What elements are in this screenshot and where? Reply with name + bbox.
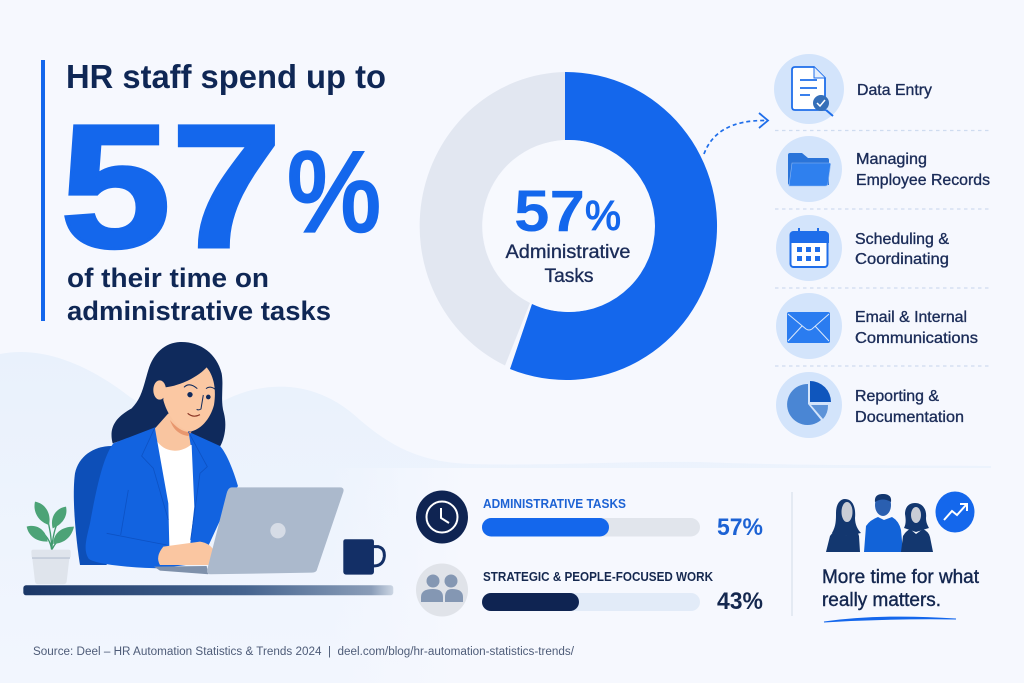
ear: [153, 380, 166, 400]
title block: [41, 58, 386, 326]
item: reporting and documentation: [776, 372, 964, 438]
donut label: 57: [514, 179, 585, 244]
icon: team: [826, 494, 933, 552]
callout: more time: [822, 492, 980, 622]
accent bar: [41, 60, 45, 321]
arrow: donut to task list: [704, 113, 768, 154]
chin shadow: [170, 420, 192, 436]
icon: clock: [416, 490, 468, 544]
item: managing employee records: Employee Records: [856, 172, 990, 189]
facial features: [184, 385, 215, 416]
item: reporting and documentation: Documentation: [855, 409, 964, 426]
donut chart: Tasks: [544, 266, 594, 287]
donut hole: [483, 140, 655, 312]
donut chart: %: [585, 192, 621, 239]
donut chart: Administrative: [506, 242, 630, 263]
item: managing employee records: [776, 136, 990, 202]
value: 57%: 57%: [717, 514, 763, 541]
title block: administrative tasks: [67, 296, 331, 326]
callout text: More time for what: [822, 567, 980, 588]
item: managing employee records: Managing: [856, 151, 927, 168]
bar: strategic work: [482, 593, 700, 611]
callout: more time: really matters.: [822, 590, 941, 611]
label: strategic work: STRATEGIC & PEOPLE-FOCUSED WORK: [483, 569, 714, 584]
neck: [155, 413, 191, 451]
task list: [774, 54, 991, 438]
subheading: of their time on: [67, 263, 269, 293]
mug: [373, 547, 384, 566]
donut chart: [420, 72, 717, 380]
remaining segment: [420, 72, 565, 366]
big percent: %: [287, 129, 381, 255]
chair: [74, 446, 112, 565]
item: scheduling and coordinating: Coordinating: [855, 251, 949, 268]
icon: people: [416, 564, 468, 616]
item: scheduling and coordinating: Scheduling &: [855, 231, 949, 248]
item: reporting and documentation: Reporting &: [855, 388, 939, 405]
icon: growth arrow: [936, 492, 974, 532]
illustration: woman at laptop: [23, 342, 393, 595]
hair: [112, 342, 225, 447]
item: data entry: Data Entry: [857, 82, 932, 99]
face: [163, 367, 215, 432]
big number: 57: [60, 89, 282, 285]
laptop base: [154, 566, 208, 574]
source: Source: Deel – HR Automation Statistics & Trends 2024 | deel.com/blog/hr-automation-statistics-trends/: [33, 646, 575, 658]
item: email and internal communications: Email & Internal: [855, 309, 967, 326]
jacket: [86, 427, 238, 568]
57% segment: [510, 72, 717, 380]
item: scheduling and coordinating: [776, 215, 949, 281]
progress bars: [416, 490, 763, 616]
hands: [158, 542, 213, 565]
shirt: [157, 442, 194, 547]
item: email and internal communications: Communications: [855, 330, 978, 347]
desk: [23, 585, 393, 595]
laptop: [207, 487, 344, 574]
label: administrative tasks: ADMINISTRATIVE TASKS: [483, 496, 626, 511]
plant: [27, 502, 74, 584]
bar: administrative tasks: [482, 518, 700, 536]
divider: [792, 492, 793, 616]
value: 43%: 43%: [717, 588, 763, 615]
underline: [824, 617, 956, 622]
item: data entry: [774, 54, 932, 124]
heading: HR staff spend up to: [66, 58, 386, 95]
item: email and internal communications: [776, 293, 978, 359]
lapels: [142, 427, 207, 540]
